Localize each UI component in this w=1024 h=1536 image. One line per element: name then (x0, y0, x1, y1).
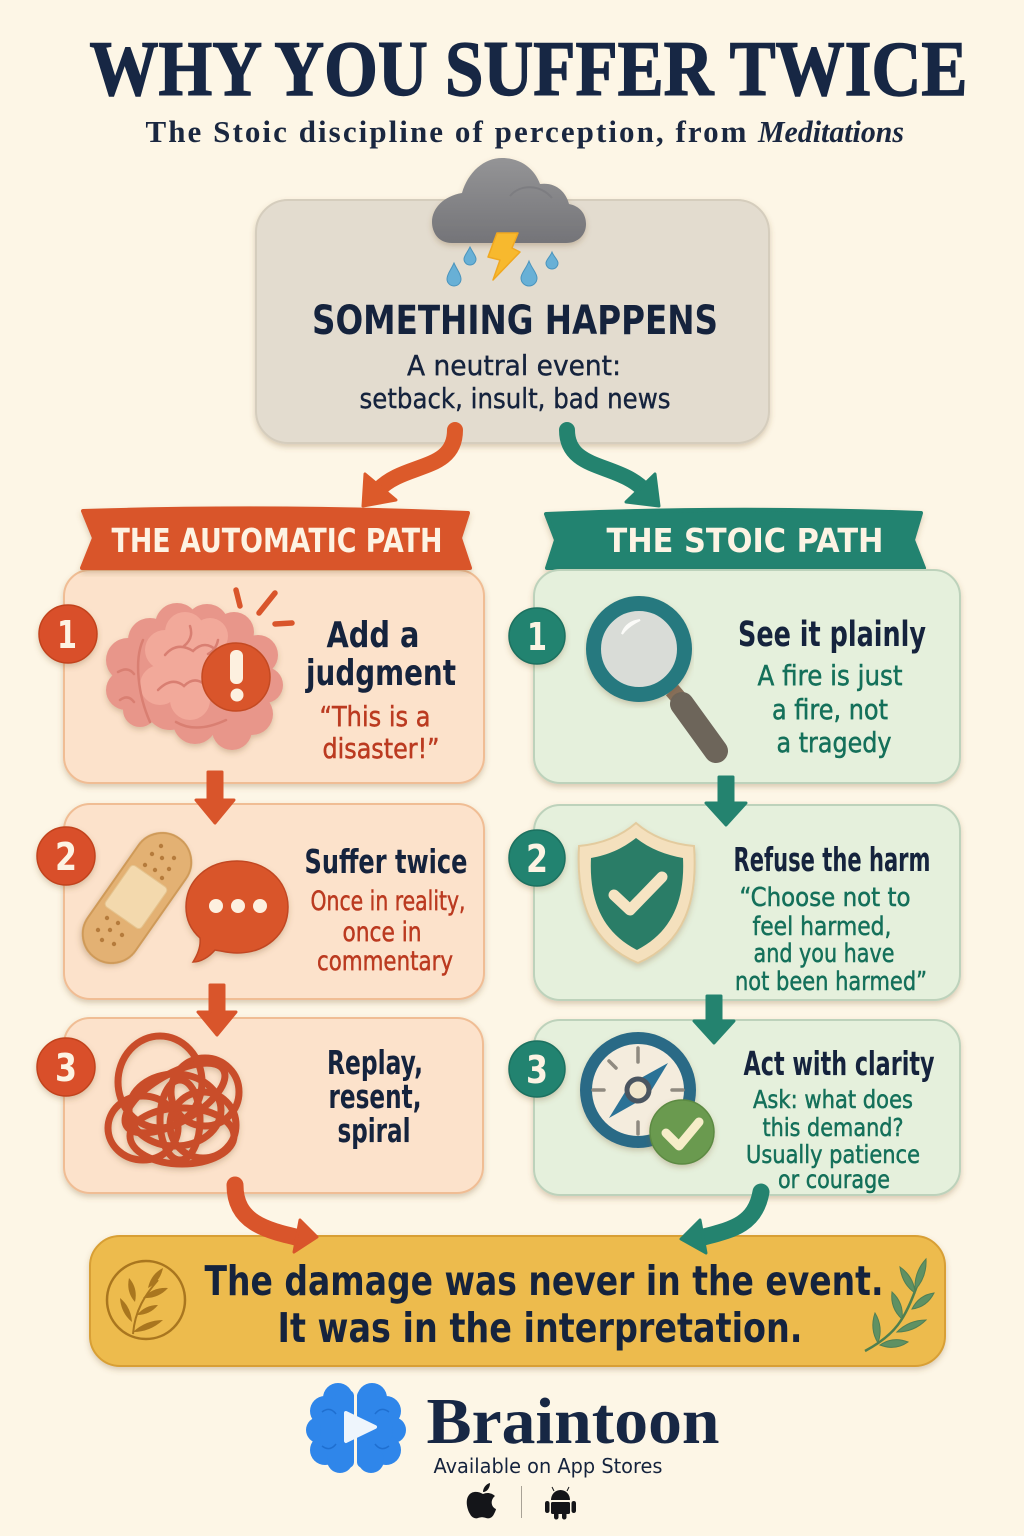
panel: conclusion (90, 1236, 945, 1366)
text: act with clarity: Ask: what does (753, 1085, 913, 1114)
rain drops (447, 247, 558, 286)
text: act with clarity: Act with clarity (744, 1044, 934, 1083)
badge: stoic 1: 1 (527, 615, 547, 659)
text: neutral event: A neutral event: (407, 349, 621, 382)
text: replay resent spiral (327, 1043, 423, 1150)
text: conclusion: It was in the interpretation. (278, 1304, 802, 1352)
text: suffer twice: Once in reality, (310, 886, 466, 917)
arrow: automatic step 1 to 2 (196, 772, 234, 823)
text: add a judgment: “This is a (320, 700, 430, 733)
badge: stoic 3: 3 (526, 1048, 548, 1092)
text: neutral event (360, 349, 670, 415)
subtitle: Meditations (757, 114, 904, 149)
banner: the automatic path (82, 508, 470, 568)
arrow: automatic to conclusion (235, 1185, 317, 1252)
badge: automatic 2 (37, 827, 95, 885)
text: act with clarity (744, 1044, 934, 1194)
text: see it plainly (738, 615, 926, 759)
badge: automatic 3: 3 (55, 1046, 77, 1090)
badge: stoic 2: 2 (526, 837, 548, 881)
arrow: to stoic path (567, 430, 659, 506)
arrow: automatic step 2 to 3 (198, 985, 236, 1035)
badge: automatic 3 (37, 1038, 95, 1096)
icon: magnifying glass (594, 604, 716, 751)
text: act with clarity: or courage (778, 1165, 890, 1194)
icon: android (545, 1487, 576, 1520)
banner: the automatic path: THE AUTOMATIC PATH (112, 521, 442, 560)
banner: the stoic path (546, 510, 924, 568)
panel: stoic step 3 (534, 1020, 960, 1195)
text: see it plainly: a tragedy (776, 726, 892, 759)
panel: stoic step 1 (534, 570, 960, 783)
text: see it plainly: A fire is just (758, 659, 903, 692)
icon: tangled knot (108, 1036, 239, 1164)
text: act with clarity: Usually patience (746, 1140, 920, 1169)
badge: stoic 2 (509, 830, 565, 886)
text: suffer twice: commentary (317, 946, 453, 977)
text: add a judgment (304, 615, 456, 765)
banner: the stoic path: THE STOIC PATH (606, 521, 884, 560)
text: see it plainly: a fire, not (772, 693, 888, 726)
badge: automatic 1: 1 (57, 613, 77, 657)
arrow: to automatic path (363, 430, 455, 506)
text: replay resent spiral: spiral (338, 1111, 410, 1150)
lightning bolt (488, 233, 520, 280)
badge: stoic 3 (509, 1041, 565, 1097)
panel: automatic step 3 (64, 1018, 483, 1193)
logo wordmark: Braintoon (426, 1385, 720, 1458)
heading: something happens: SOMETHING HAPPENS (312, 298, 718, 344)
text: suffer twice: once in (342, 917, 422, 948)
icon: compass with check (586, 1038, 714, 1164)
panel: something happens (256, 200, 769, 443)
arrow: stoic to conclusion (681, 1192, 761, 1253)
panel: automatic step 1 (64, 570, 484, 783)
subtitle: The Stoic discipline of perception, from (146, 114, 747, 149)
text: conclusion (204, 1257, 884, 1352)
logo: brain play icon (306, 1383, 406, 1473)
text: refuse the harm (734, 840, 930, 997)
text: add a judgment: disaster!” (322, 732, 440, 765)
text: suffer twice: Suffer twice (304, 842, 468, 881)
icon: bandage and speech bubble (71, 822, 288, 974)
text: add a judgment: judgment (304, 653, 456, 694)
divider between store icons (521, 1486, 522, 1518)
icon: storm cloud (432, 158, 586, 286)
icon: apple (467, 1483, 496, 1518)
icon: laurel medallion (107, 1261, 185, 1339)
text: refuse the harm: not been harmed” (735, 967, 927, 997)
text: replay resent spiral: Replay, (327, 1043, 423, 1082)
text: see it plainly: See it plainly (738, 615, 926, 655)
text: replay resent spiral: resent, (328, 1077, 422, 1116)
panel: automatic step 2 (64, 804, 484, 999)
arrow: stoic step 1 to 2 (706, 777, 746, 825)
badge: automatic 1 (39, 605, 97, 663)
text: refuse the harm: “Choose not to (740, 883, 910, 913)
badge: stoic 1 (509, 608, 565, 664)
text: act with clarity: this demand? (762, 1113, 904, 1142)
text: refuse the harm: and you have (754, 939, 894, 969)
icon: brain with alert (106, 590, 292, 750)
text: conclusion: The damage was never in the event. (204, 1257, 884, 1305)
text: available on app stores: Available on App Stores (434, 1454, 662, 1478)
text: refuse the harm: feel harmed, (752, 912, 892, 942)
icon: olive branch (865, 1259, 934, 1351)
icon: shield with check (579, 823, 695, 963)
text: add a judgment: Add a (326, 615, 420, 656)
arrow: stoic step 2 to 3 (694, 996, 734, 1043)
badge: automatic 2: 2 (55, 835, 77, 879)
panel: stoic step 2 (534, 805, 960, 1000)
text: neutral event: setback, insult, bad news (360, 382, 670, 415)
text: suffer twice (304, 842, 468, 977)
